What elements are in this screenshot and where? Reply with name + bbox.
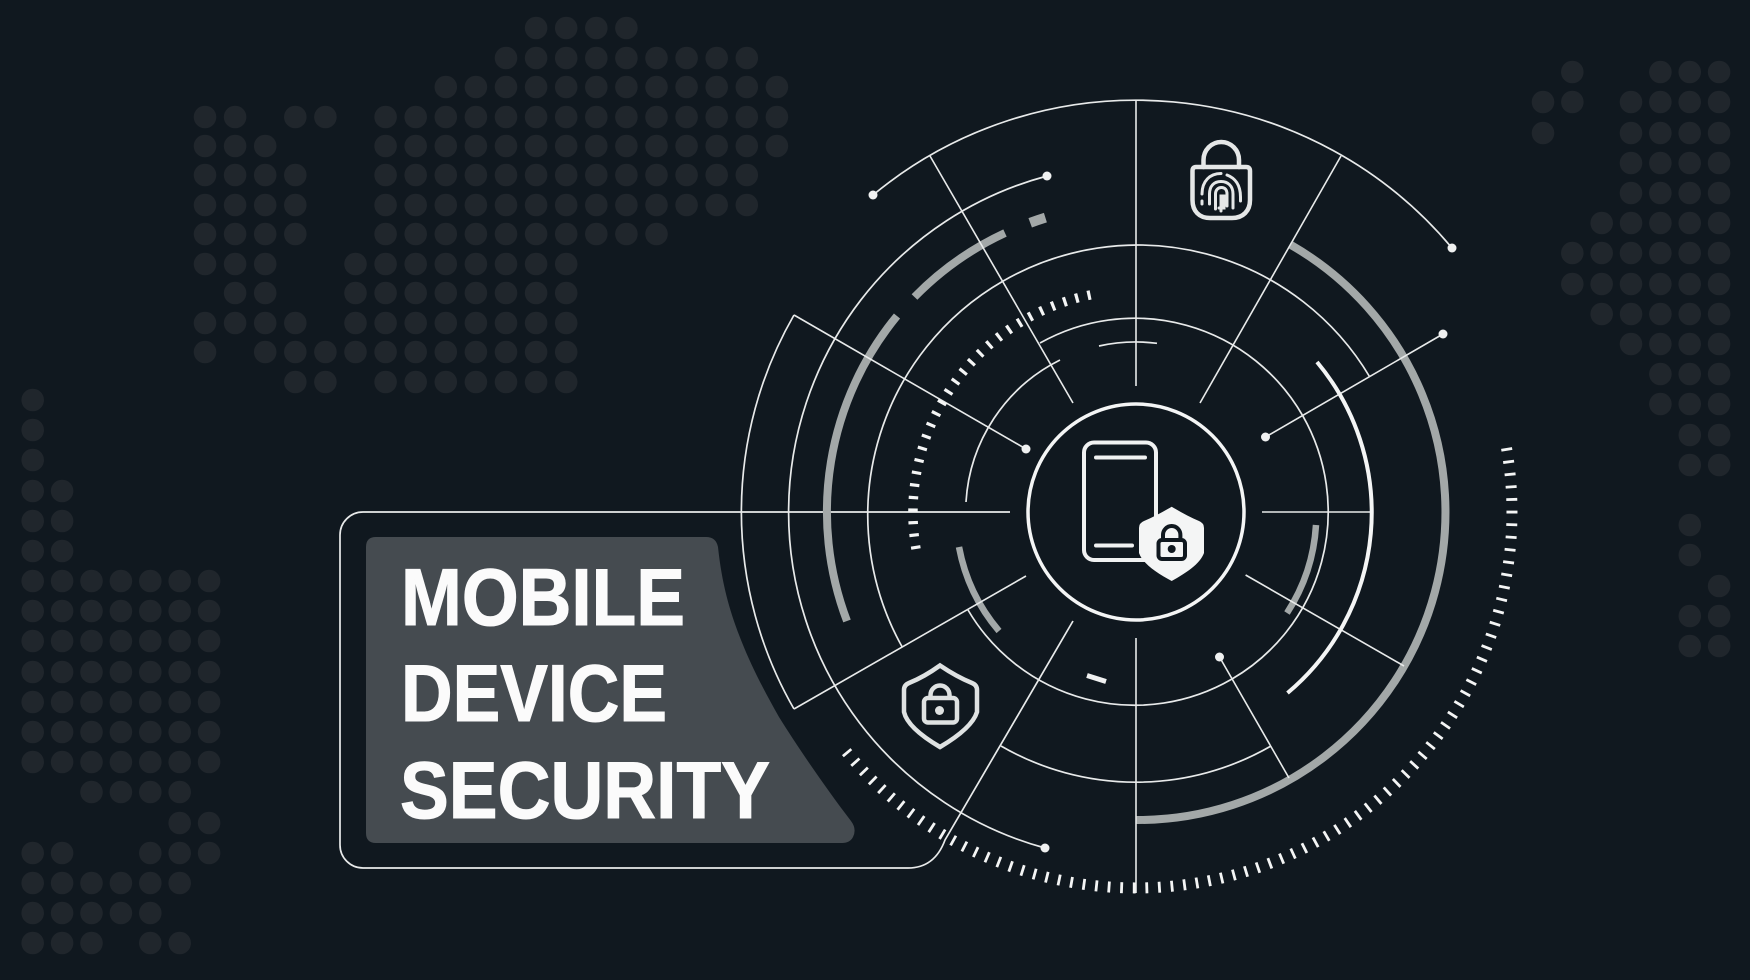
dotted world map: right landmass — [1543, 72, 1720, 646]
central circle — [1028, 404, 1244, 620]
icon: phone with shield lock — [1084, 442, 1204, 581]
title text: MOBILE — [401, 553, 685, 643]
icon: shield padlock — [904, 666, 977, 747]
outer tick ring — [846, 448, 1512, 888]
gray arc segments — [827, 218, 1445, 820]
title panel background shape — [366, 537, 855, 843]
thin radar rings — [741, 100, 1452, 848]
title text: SECURITY — [400, 746, 770, 836]
dotted world map: top landmass — [205, 28, 777, 382]
bold white arc — [1288, 362, 1372, 693]
title text: DEVICE — [401, 649, 667, 739]
small dash mark — [1087, 676, 1106, 682]
dotted world map: left landmass — [33, 400, 210, 943]
icon: fingerprint padlock — [1192, 142, 1250, 218]
line end dots — [868, 172, 1456, 852]
inner tick ring — [913, 294, 1095, 549]
title text — [400, 553, 770, 836]
title panel outline joined to radar lines — [340, 512, 1073, 868]
radial spokes — [794, 100, 1443, 893]
